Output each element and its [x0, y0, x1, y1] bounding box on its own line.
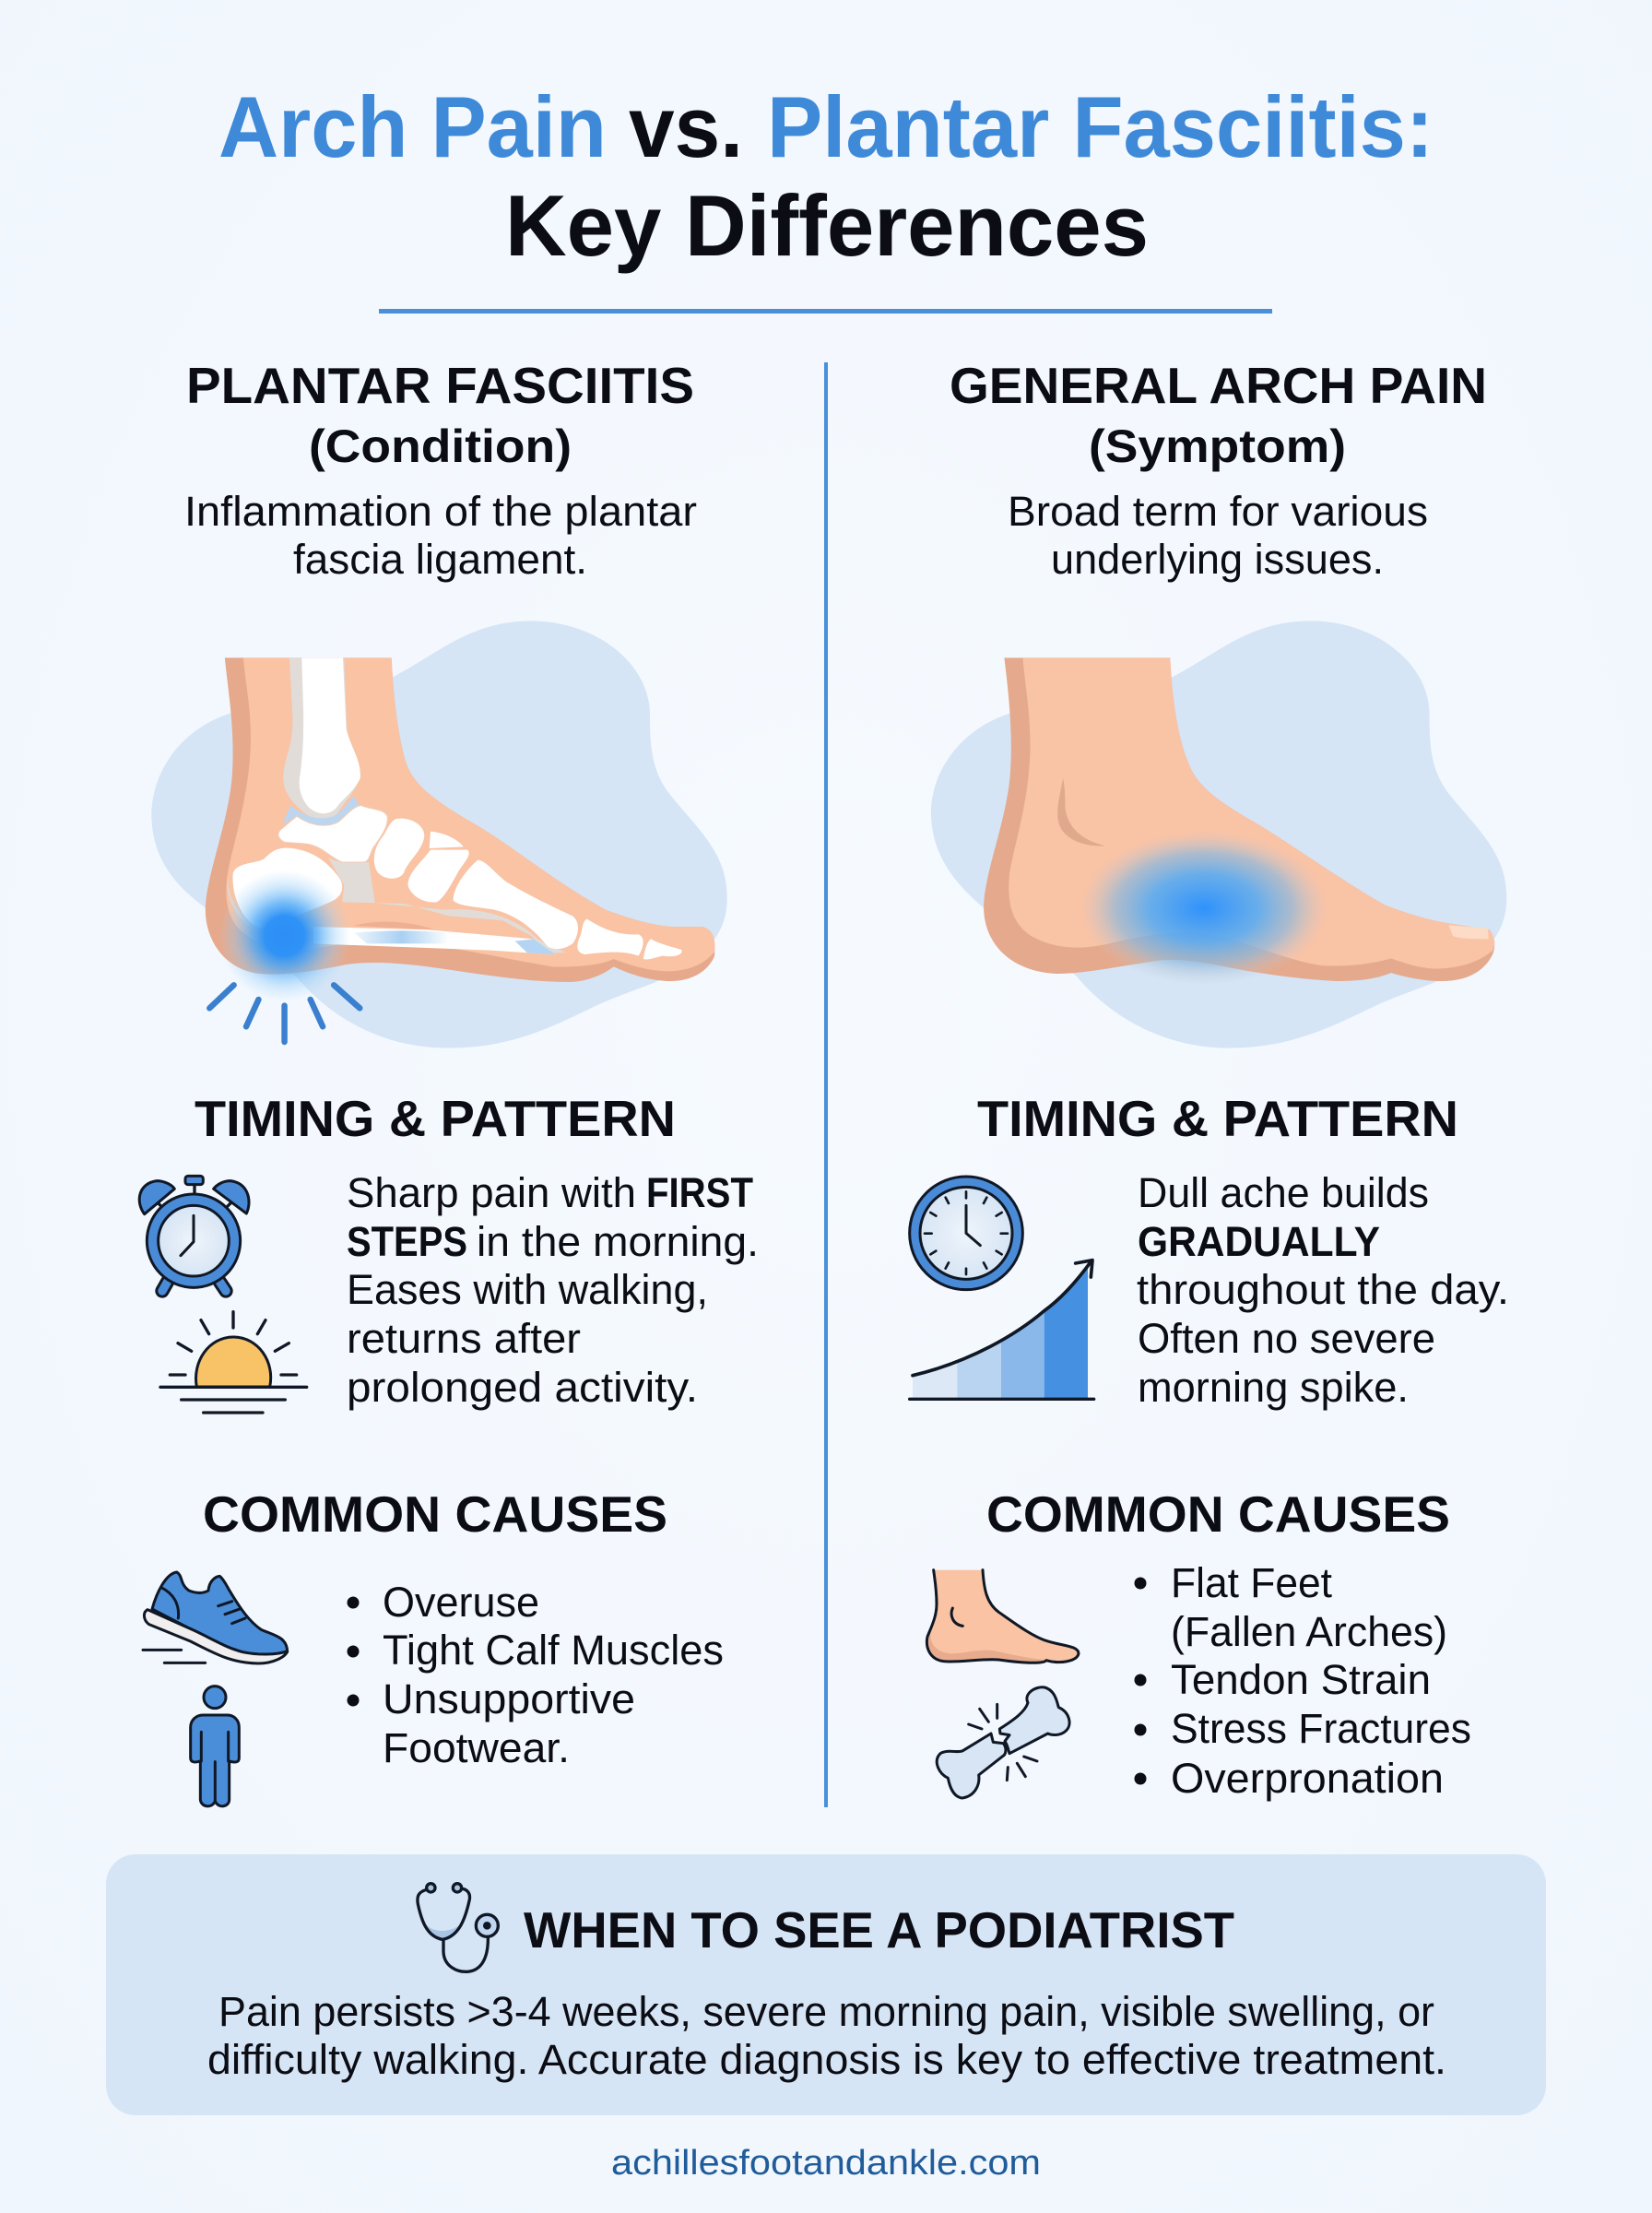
callout heading: WHEN TO SEE A PODIATRIST: [524, 1901, 1234, 1959]
panel: plantar fasciitis intro: (Condition): [309, 420, 572, 472]
title: [218, 78, 1434, 274]
left timing text: [347, 1169, 759, 1411]
callout text: [207, 1988, 1446, 2083]
chart: rising pain curve: [910, 1260, 1094, 1399]
left timing text: Sharp pain with: [347, 1169, 636, 1216]
panel: plantar fasciitis intro: fascia ligament.: [293, 536, 587, 583]
panel: general arch pain intro: GENERAL ARCH PAIN: [950, 357, 1487, 414]
panel: general arch pain intro: underlying issues.: [1051, 536, 1384, 583]
right timing heading: TIMING & PATTERN: [977, 1090, 1458, 1147]
left timing text: in the morning.: [477, 1218, 759, 1265]
icon: running shoe: [143, 1572, 288, 1663]
right causes list: [1134, 1559, 1471, 1802]
left causes heading: COMMON CAUSES: [203, 1485, 667, 1543]
left causes list: [347, 1579, 724, 1771]
icon: wall clock: [910, 1177, 1022, 1290]
pain glow at arch: [1080, 832, 1328, 985]
left timing text: STEPS: [347, 1218, 467, 1265]
left causes list: Unsupportive: [383, 1675, 635, 1722]
icon: sunrise: [160, 1312, 307, 1413]
icon: person: [191, 1686, 239, 1806]
right causes list: Stress Fractures: [1171, 1705, 1471, 1752]
left causes list: Overuse: [383, 1579, 539, 1626]
icon: alarm clock and sunrise: [139, 1176, 307, 1413]
left causes list: Tight Calf Muscles: [383, 1627, 724, 1674]
left timing heading: TIMING & PATTERN: [195, 1090, 676, 1147]
illustration: foot with arch pain: [931, 621, 1506, 1048]
panel: general arch pain intro: [950, 357, 1487, 583]
right timing text: morning spike.: [1138, 1364, 1409, 1411]
right causes list: (Fallen Arches): [1171, 1608, 1447, 1655]
right causes heading: COMMON CAUSES: [986, 1485, 1450, 1543]
title: vs.: [629, 78, 743, 175]
footer website: achillesfootandankle.com: [611, 2144, 1041, 2183]
pain glow at heel: [218, 870, 350, 1002]
right causes list: Overpronation: [1171, 1755, 1444, 1802]
left timing text: Eases with walking,: [347, 1266, 708, 1313]
right timing text: Dull ache builds: [1138, 1169, 1429, 1216]
title: Key Differences: [505, 177, 1149, 274]
panel: plantar fasciitis intro: Inflammation of the plantar: [184, 488, 697, 535]
icon: stethoscope: [418, 1884, 498, 1971]
icon: flat foot and broken bone: [926, 1570, 1079, 1798]
icon: fractured bone: [937, 1687, 1069, 1798]
ankle crease: [1057, 778, 1105, 846]
icon: flat foot: [926, 1570, 1079, 1663]
panel: plantar fasciitis intro: PLANTAR FASCIITIS: [186, 357, 694, 414]
callout text: difficulty walking. Accurate diagnosis is key to effective treatment.: [207, 2036, 1446, 2083]
right timing text: [1137, 1169, 1509, 1411]
right timing text: Often no severe: [1138, 1315, 1435, 1362]
right timing text: throughout the day.: [1137, 1266, 1509, 1313]
bone: tibia: [282, 657, 360, 826]
panel: general arch pain intro: Broad term for various: [1008, 488, 1428, 535]
right causes list: Flat Feet: [1171, 1559, 1332, 1606]
left timing text: FIRST: [646, 1169, 753, 1216]
left causes list: Footwear.: [383, 1724, 570, 1771]
left timing text: returns after: [347, 1315, 581, 1362]
left timing text: prolonged activity.: [347, 1364, 698, 1411]
right causes list: Tendon Strain: [1171, 1656, 1431, 1703]
toenail: [1449, 925, 1489, 939]
bones: tarsals and metatarsals: [227, 805, 682, 959]
icon: clock and rising chart: [910, 1177, 1094, 1399]
radiating pain lines: [209, 985, 360, 1042]
icon: running shoe and person: [143, 1572, 288, 1806]
plantar fascia band: [313, 922, 556, 954]
callout text: Pain persists >3-4 weeks, severe morning pain, visible swelling, or: [218, 1988, 1434, 2035]
callout: when to see a podiatrist: [106, 1854, 1546, 2115]
right timing text: GRADUALLY: [1138, 1218, 1380, 1265]
title: Plantar Fasciitis:: [767, 78, 1434, 175]
illustration: foot anatomy with heel pain: [151, 621, 727, 1048]
panel: plantar fasciitis intro: [184, 357, 697, 583]
panel: general arch pain intro: (Symptom): [1089, 420, 1346, 472]
title: Arch Pain: [218, 78, 607, 175]
icon: alarm clock: [139, 1176, 249, 1291]
